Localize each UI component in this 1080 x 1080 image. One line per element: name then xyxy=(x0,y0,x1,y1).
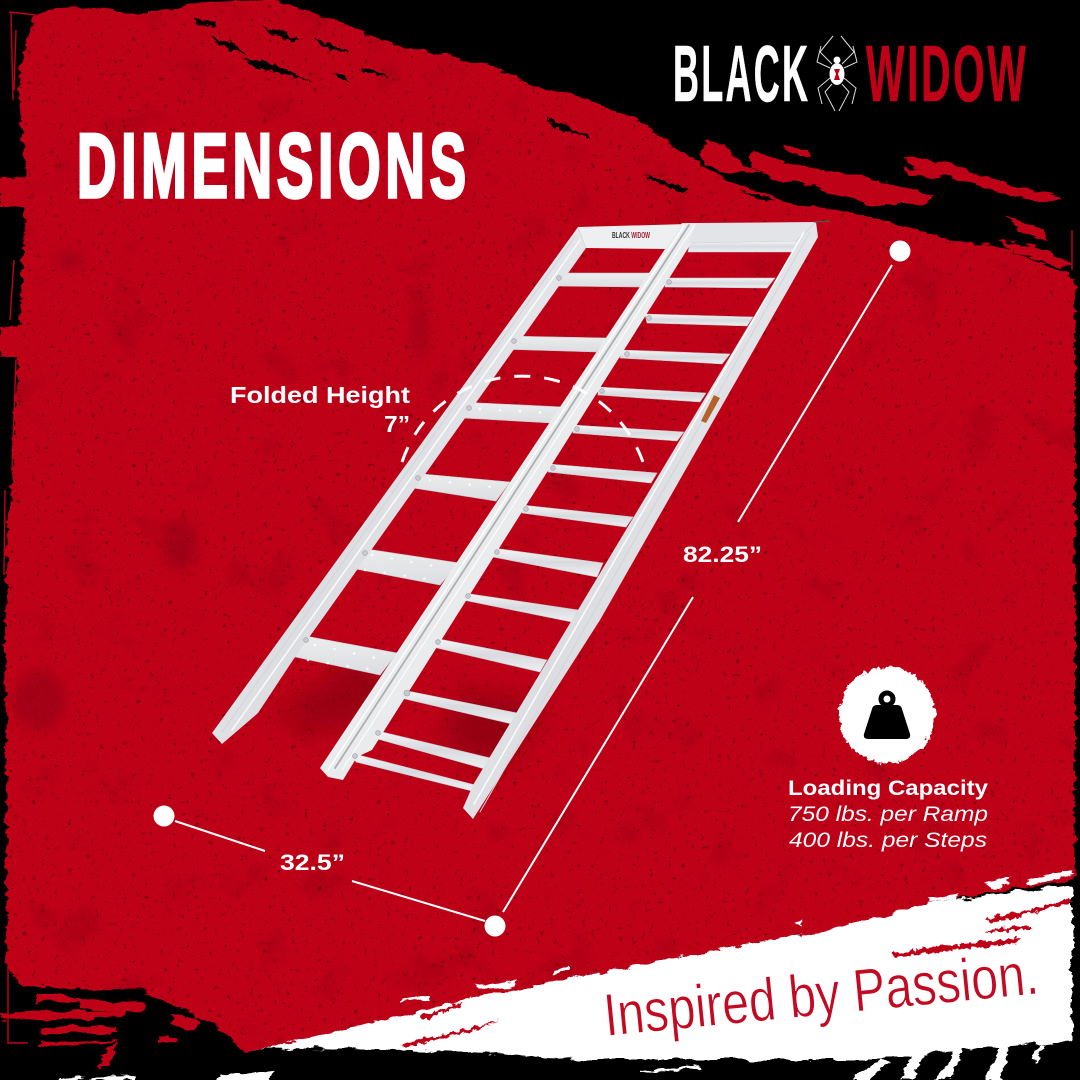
right outer rail xyxy=(463,222,818,819)
loading capacity callout xyxy=(788,667,988,852)
top hook xyxy=(814,221,830,222)
capacity text: 400 lbs. per Steps xyxy=(789,829,988,852)
right ramp top plate xyxy=(688,222,816,243)
capacity text xyxy=(788,777,988,852)
rung bolts xyxy=(304,276,671,758)
hinge detail lines xyxy=(222,225,810,812)
folded height label xyxy=(230,382,410,437)
left ramp top plate xyxy=(578,224,688,249)
capacity text: 750 lbs. per Ramp xyxy=(788,803,988,826)
left outer rail xyxy=(212,227,586,744)
width dimension: 32.5 xyxy=(154,806,485,921)
orange warning sticker xyxy=(701,395,720,423)
capacity text: Loading Capacity xyxy=(788,777,988,800)
left ramp rungs xyxy=(272,273,652,675)
red scratches in white banner xyxy=(400,898,1070,1048)
icon: weight in white splat xyxy=(839,667,935,763)
length dimension: 82.25 xyxy=(484,240,910,936)
icon: spider xyxy=(817,36,857,111)
white brush stroke banner xyxy=(60,870,1072,1080)
brand logo xyxy=(673,30,1028,119)
folding ramp illustration xyxy=(212,221,830,819)
centre hinge rail xyxy=(320,223,704,780)
width dimension: 32.5: 32.5” xyxy=(280,850,345,875)
logo wordmark: widow: WIDOW xyxy=(866,30,1028,119)
folded height label: 7” xyxy=(384,411,410,437)
logo wordmark: black: BLACK xyxy=(673,30,810,119)
ground shadows under ramp xyxy=(270,660,550,770)
dimensions title: DIMENSIONS xyxy=(77,115,471,216)
ramp logo mark: BLACK WIDOW xyxy=(612,231,650,240)
left rung holes xyxy=(308,409,550,670)
right ramp rungs xyxy=(351,241,796,791)
folded height arc xyxy=(402,376,643,462)
folded height label: Folded Height xyxy=(230,382,410,408)
length dimension: 82.25: 82.25” xyxy=(683,542,762,567)
